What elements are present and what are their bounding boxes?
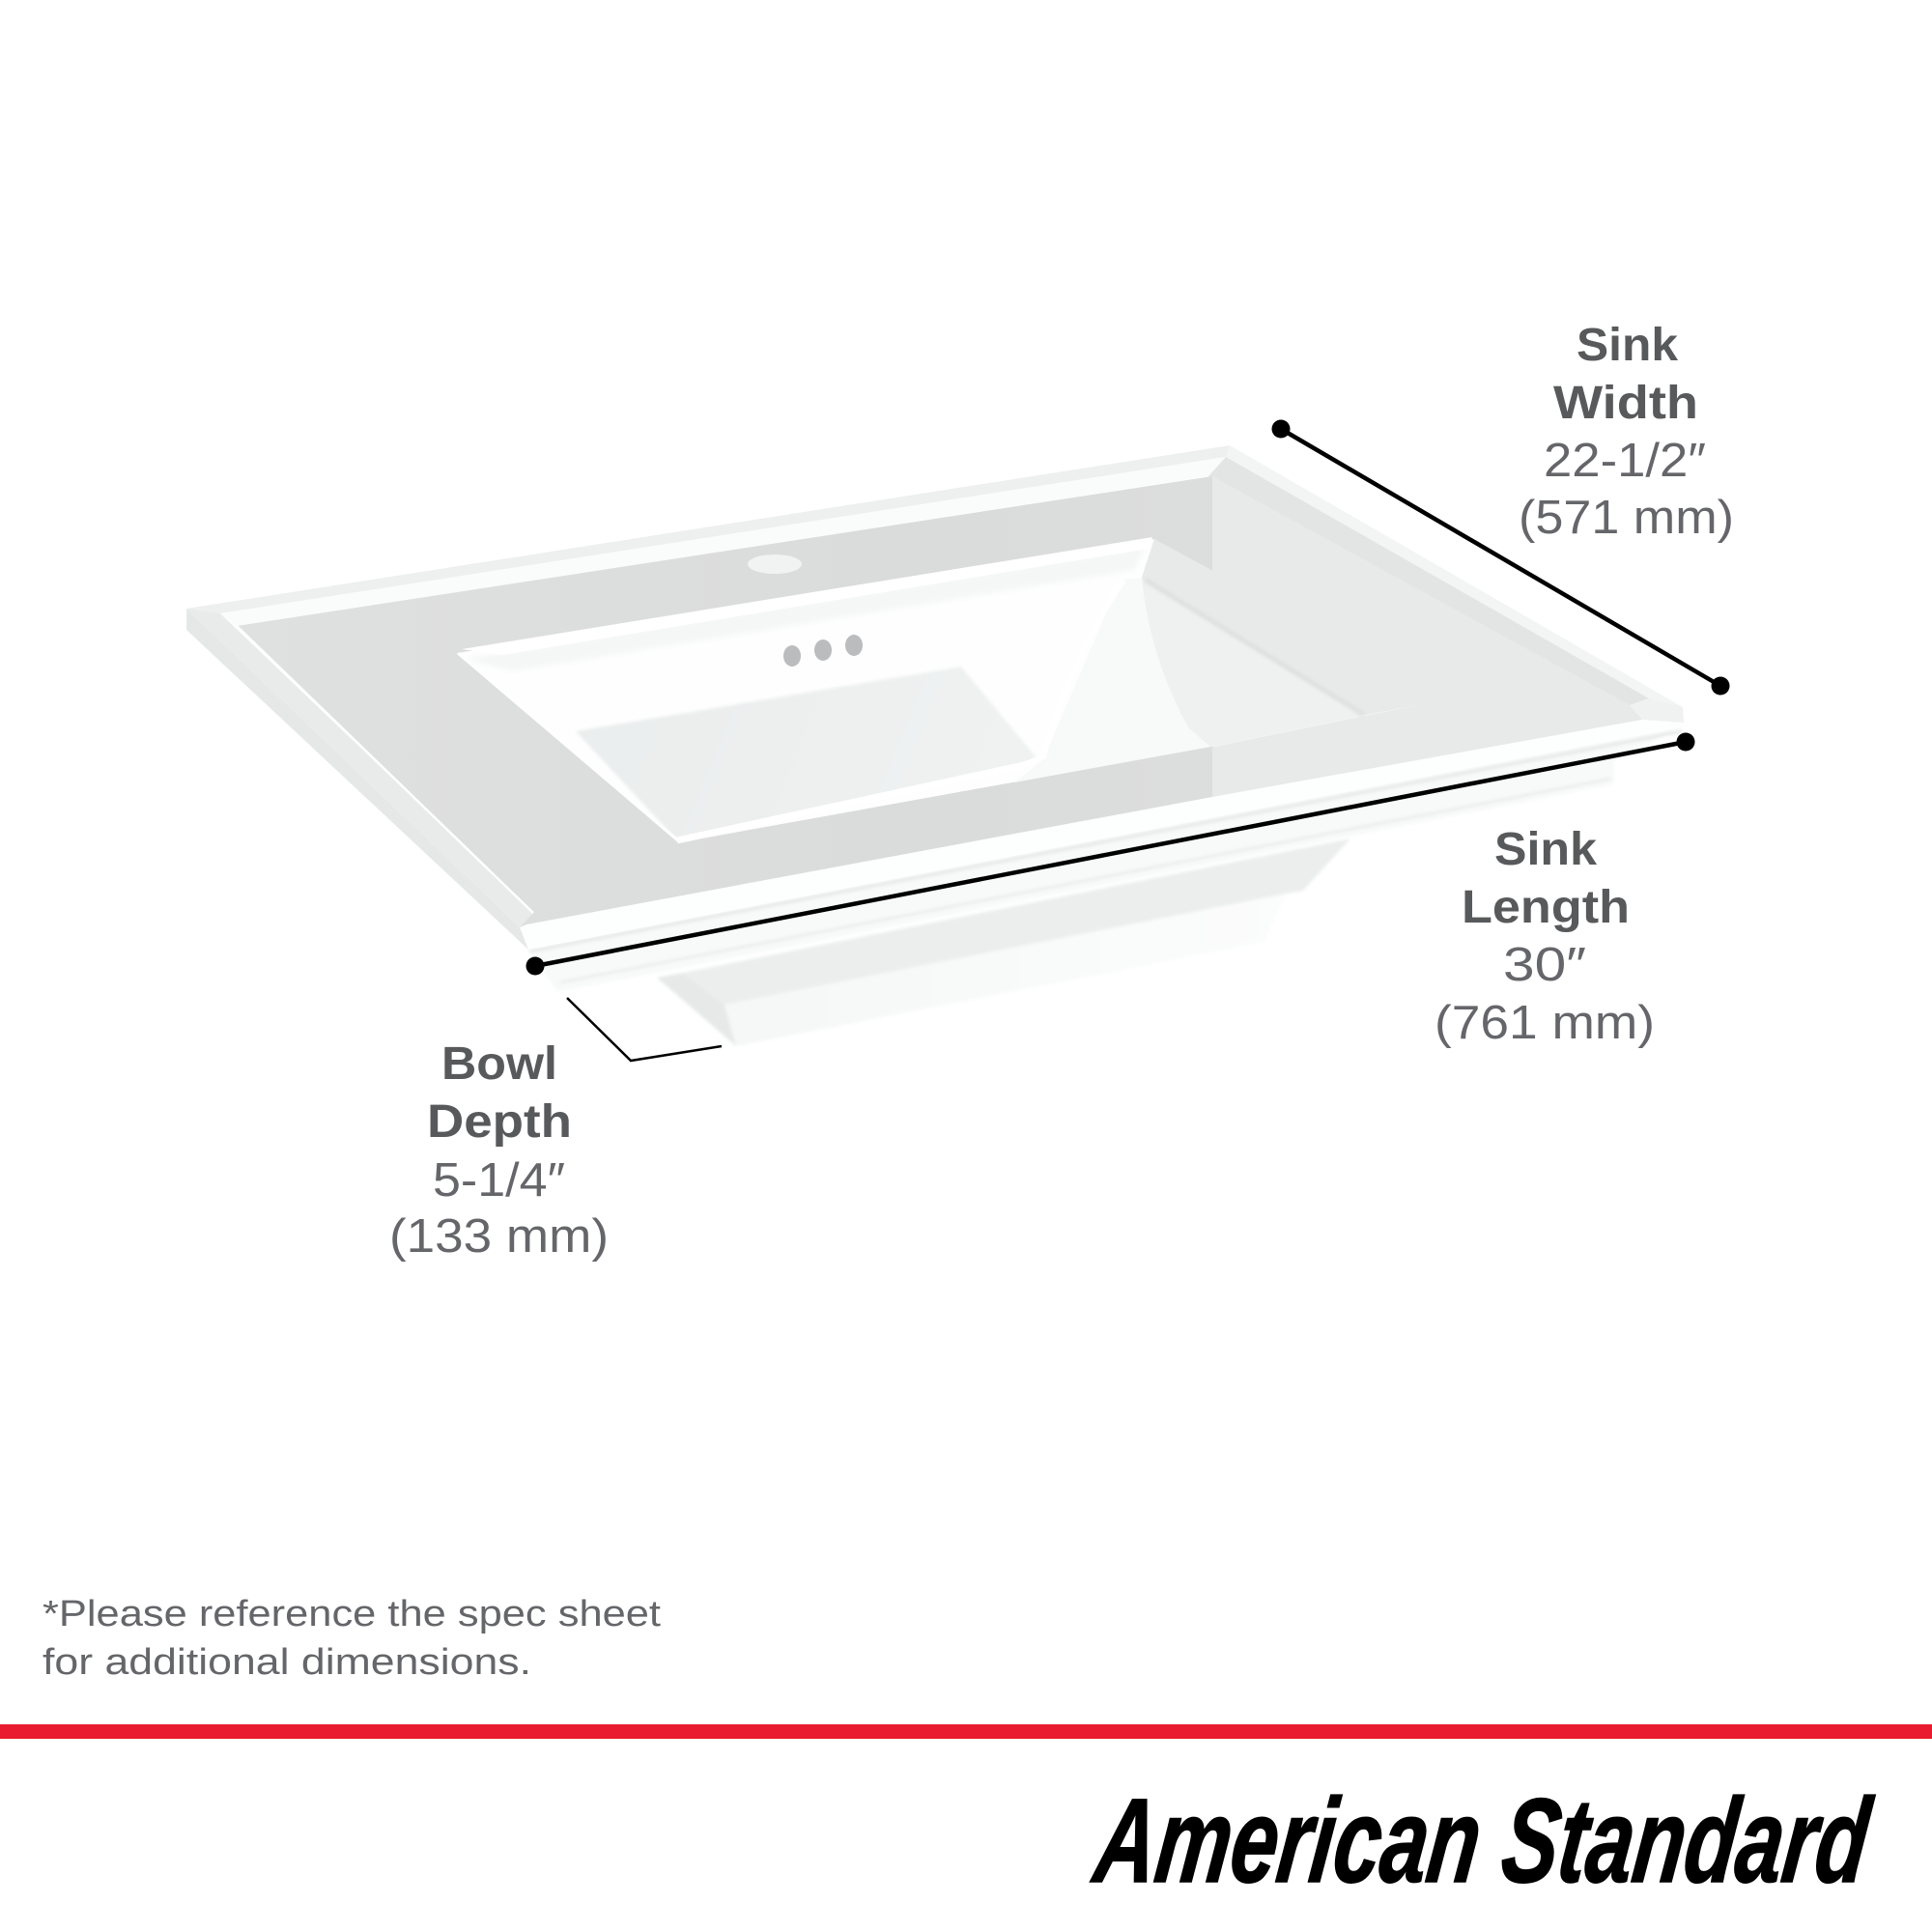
sink illustration: [186, 445, 1685, 1046]
label: bowl depth: 5-1/4″: [433, 1154, 565, 1207]
bowl opening: [458, 537, 1427, 842]
label: sink length: (761 mm): [1435, 997, 1655, 1049]
footnote: [43, 1594, 662, 1683]
overflow holes: [783, 635, 863, 667]
footnote: for additional dimensions.: [43, 1642, 531, 1683]
label: sink width: (571 mm): [1519, 492, 1734, 544]
basin deck grey surface: [237, 476, 1642, 927]
label: sink width: 22-1/2″: [1544, 435, 1706, 487]
label: sink width: [1519, 320, 1734, 544]
dimension line: sink width: [1271, 419, 1729, 696]
label: sink width: Width: [1553, 378, 1698, 429]
dimension bracket: bowl depth: [567, 998, 722, 1061]
dimension line: sink length: [526, 732, 1694, 976]
lower moulding: [527, 726, 1683, 992]
faucet hole: [748, 554, 802, 574]
footnote: *Please reference the spec sheet: [43, 1594, 662, 1634]
bowl highlights: [458, 580, 1123, 842]
label: bowl depth: (133 mm): [389, 1210, 609, 1263]
label: bowl depth: Depth: [427, 1096, 572, 1148]
label: bowl depth: Bowl: [441, 1038, 557, 1090]
countertop rim and side: [186, 445, 1685, 950]
label: bowl depth: [389, 1038, 609, 1263]
label: sink length: 30″: [1503, 939, 1586, 991]
label: sink length: Sink: [1494, 824, 1597, 875]
pedestal base: [657, 838, 1350, 1046]
label: sink length: Length: [1462, 882, 1630, 933]
red divider bar: [0, 1724, 1932, 1739]
bowl floor: [576, 667, 1039, 840]
label: sink width: Sink: [1577, 320, 1678, 371]
label: sink length: [1435, 824, 1655, 1049]
